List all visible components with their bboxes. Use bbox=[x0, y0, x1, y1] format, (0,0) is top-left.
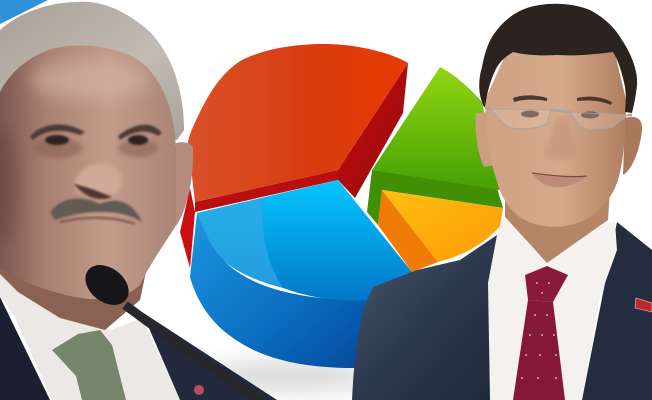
pie slice: red bbox=[188, 44, 408, 202]
left cheek shadow bbox=[0, 125, 16, 245]
glasses bridge bbox=[485, 108, 632, 115]
glasses right lens bbox=[570, 112, 628, 129]
mouth bbox=[532, 173, 587, 187]
eye socket left bbox=[34, 138, 82, 158]
portrait: left man bbox=[0, 2, 277, 400]
eye left bbox=[521, 110, 539, 118]
mouth bbox=[60, 218, 135, 224]
mouth line bbox=[532, 173, 587, 177]
pie shadow bbox=[200, 364, 380, 388]
lapel pin bbox=[194, 385, 204, 395]
tie dots bbox=[521, 282, 557, 379]
eye left bbox=[45, 135, 69, 145]
tie knot bbox=[525, 266, 568, 302]
shirt bbox=[0, 272, 180, 400]
pie slice: orange bbox=[382, 190, 503, 262]
microphone bbox=[78, 257, 262, 400]
moustache bbox=[50, 198, 142, 222]
pie slice: blue bbox=[197, 180, 412, 300]
pie slice: blue side bbox=[190, 213, 367, 368]
icon: blue corner accent bbox=[0, 0, 48, 24]
eyebrow left bbox=[513, 95, 547, 102]
glasses left lens bbox=[490, 109, 551, 129]
face bbox=[0, 45, 182, 299]
pie slice: blue lighter wedge bbox=[197, 198, 283, 288]
nose shadow bbox=[74, 184, 112, 199]
pie slice: red inner edge bbox=[195, 170, 338, 212]
microphone head bbox=[78, 257, 136, 313]
neck bbox=[0, 262, 148, 330]
eye right bbox=[581, 112, 599, 118]
suit left bbox=[352, 235, 497, 400]
face bbox=[485, 45, 626, 227]
neck bbox=[505, 190, 610, 263]
pie slice: red right side bbox=[338, 63, 408, 198]
portrait: right man bbox=[352, 4, 652, 400]
shirt bbox=[488, 217, 617, 400]
suit left bbox=[0, 297, 50, 400]
forehead highlight bbox=[30, 60, 150, 100]
eyebrow left bbox=[30, 125, 85, 140]
suit right bbox=[582, 222, 652, 400]
ear left bbox=[475, 112, 496, 167]
suit right bbox=[142, 312, 277, 400]
nose bbox=[544, 118, 578, 160]
hair bbox=[479, 4, 637, 113]
tie bbox=[513, 300, 565, 400]
hair bbox=[0, 2, 184, 140]
microphone stem bbox=[125, 305, 262, 400]
pie chart bbox=[180, 44, 503, 388]
eyebrow right bbox=[118, 125, 162, 140]
pie slice: red left side bbox=[180, 188, 195, 268]
pie slice: green bbox=[372, 67, 500, 190]
nose bbox=[75, 163, 122, 196]
lapel pin: flag bbox=[635, 298, 652, 312]
pie slice: green side bbox=[367, 170, 503, 225]
eye socket right bbox=[118, 139, 158, 157]
ear right bbox=[623, 117, 642, 175]
pie slice: orange side bbox=[378, 190, 438, 272]
eyebrow right bbox=[577, 97, 612, 105]
tie bbox=[52, 330, 126, 400]
ear bbox=[176, 142, 193, 226]
eye right bbox=[128, 135, 148, 145]
glasses bbox=[485, 108, 632, 129]
